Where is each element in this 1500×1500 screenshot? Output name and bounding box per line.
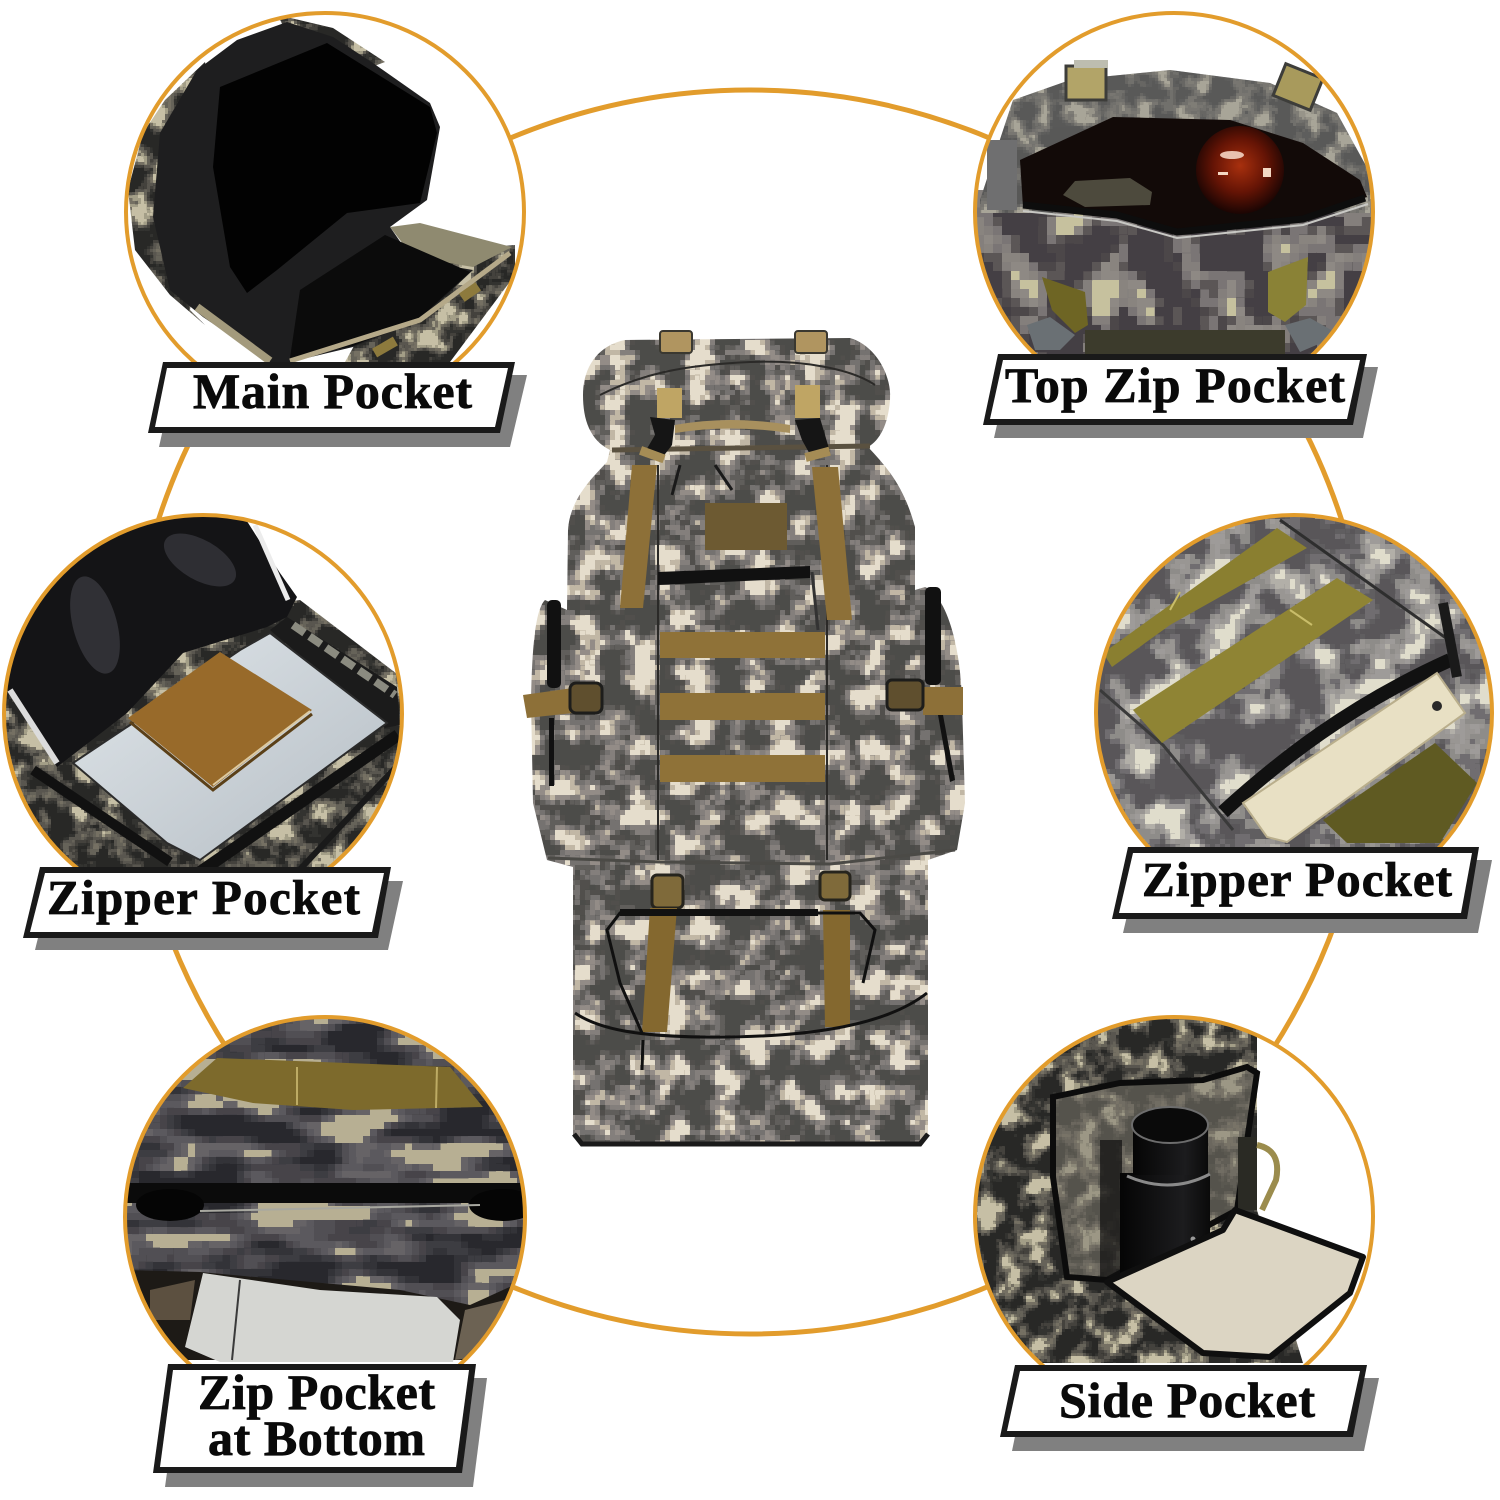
side pocket photo [977, 1019, 1366, 1363]
ring [126, 13, 524, 411]
label: zip pocket at bottom [153, 1364, 487, 1487]
notebook [128, 652, 312, 787]
label: main pocket [148, 362, 527, 447]
top buckles [1066, 66, 1106, 100]
panel: zip pocket at bottom [123, 1015, 527, 1364]
main pocket photo [128, 18, 515, 362]
zipper pocket right photo [1098, 517, 1490, 847]
pocket opening [1053, 1067, 1257, 1280]
panel: zipper pocket left [2, 513, 404, 867]
long straps [620, 465, 852, 620]
helmet orb [1196, 126, 1284, 214]
label: top zip pocket: Top Zip Pocket [1005, 357, 1345, 413]
label: zipper pocket left [23, 867, 403, 950]
label: zipper pocket right: Zipper Pocket [1142, 852, 1453, 907]
lower pocket interior [125, 1270, 525, 1360]
central backpack [520, 325, 980, 1155]
olive strap [183, 1058, 483, 1110]
label: zipper pocket left: Zipper Pocket [47, 870, 361, 925]
horizontal webbing [660, 632, 825, 782]
lid straps [657, 385, 820, 433]
panel: side pocket [973, 1015, 1375, 1365]
panel: main pocket [124, 11, 526, 362]
top zip pocket photo [977, 60, 1371, 354]
label: side pocket: Side Pocket [1059, 1372, 1315, 1428]
bottom tabs [1042, 277, 1088, 333]
orange connecting circle [128, 90, 1372, 1334]
olive straps [1103, 528, 1307, 667]
ring [975, 13, 1373, 411]
zip pocket at bottom photo [125, 1017, 537, 1362]
ring [1096, 515, 1492, 911]
ring [4, 515, 402, 913]
zipper band [125, 1183, 525, 1203]
mesh and loop [1238, 1137, 1257, 1210]
zipper pocket left photo [6, 517, 400, 867]
laptop [73, 633, 387, 860]
seams and lid shadow [548, 362, 955, 864]
camouflage body [520, 325, 980, 1155]
phone [1243, 673, 1465, 842]
label: top zip pocket [983, 354, 1378, 438]
glasses case [1063, 178, 1152, 207]
olive patch [1323, 743, 1477, 843]
label: main pocket: Main Pocket [193, 363, 472, 419]
white roll [185, 1273, 460, 1362]
label: zipper pocket right [1112, 847, 1492, 933]
black lining [0, 505, 297, 767]
panel: top zip pocket [973, 11, 1375, 354]
front patch [705, 503, 787, 550]
side straps and buckles [523, 680, 963, 718]
top handles [660, 331, 827, 353]
lower pocket zippers [574, 909, 928, 1144]
bottle [1100, 1140, 1122, 1277]
label: side pocket [1000, 1365, 1379, 1451]
zipper [1223, 660, 1450, 812]
panel: zipper pocket right [1094, 513, 1494, 847]
black buckles [639, 417, 831, 463]
label: zip pocket at bottom: Zip Pocket [198, 1364, 435, 1420]
label: zip pocket at bottom: at Bottom [208, 1410, 425, 1466]
ring [975, 1017, 1373, 1415]
side pockets zippers [547, 587, 955, 786]
lower straps and buckles [642, 872, 850, 1032]
front zipper [658, 566, 818, 630]
ring [125, 1017, 525, 1417]
small zippers [672, 465, 732, 495]
open flap [1107, 1210, 1363, 1357]
